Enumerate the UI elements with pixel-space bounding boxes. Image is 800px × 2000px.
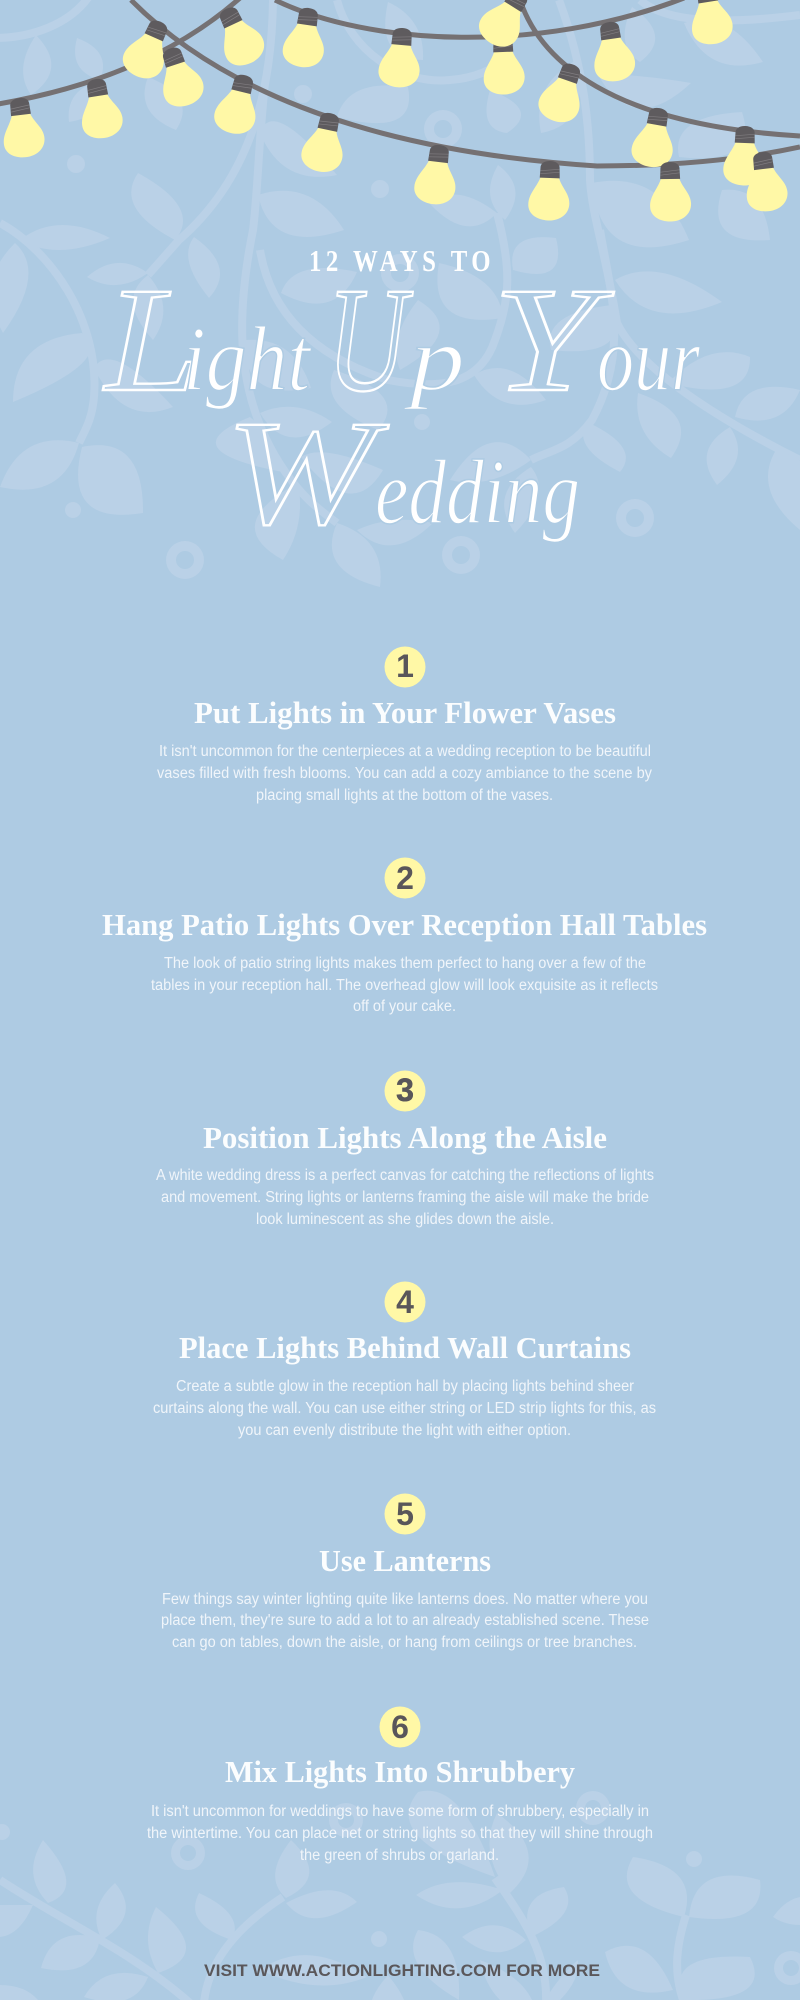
heading 1: Put Lights in Your Flower Vases	[194, 695, 616, 730]
body text 4: you can evenly distribute the light with either option.	[238, 1422, 571, 1439]
panel: tip 5	[161, 1494, 649, 1651]
body text 6: It isn't uncommon for weddings to have some form of shrubbery, especially in	[151, 1803, 649, 1820]
number badge 4	[384, 1282, 426, 1322]
body text 5: place them, they're sure to add a lot to an already established scene. These	[161, 1612, 649, 1629]
number badge 3: 3	[396, 1072, 414, 1108]
number badge 2: 2	[396, 860, 414, 896]
number badge 6	[380, 1706, 420, 1748]
panel: tip 4	[153, 1282, 656, 1439]
title line 2: W	[225, 390, 389, 556]
heading 4: Place Lights Behind Wall Curtains	[179, 1330, 631, 1365]
body text 2: tables in your reception hall. The overhead glow will look exquisite as it reflects	[151, 977, 658, 994]
top foliage background	[0, 0, 800, 587]
heading 5: Use Lanterns	[319, 1543, 491, 1578]
number badge 4: 4	[396, 1284, 414, 1320]
body text 1: vases filled with fresh blooms. You can add a cozy ambiance to the scene by	[157, 765, 652, 782]
body text 6: the wintertime. You can place net or string lights so that they will shine through	[147, 1825, 653, 1842]
panel: tip 2	[102, 858, 707, 1015]
body text 1	[157, 743, 652, 804]
number badge 5: 5	[396, 1496, 414, 1532]
body text 2: off of your cake.	[353, 998, 456, 1015]
body text 6	[147, 1803, 653, 1864]
heading 6: Mix Lights Into Shrubbery	[225, 1754, 575, 1789]
body text 3: and movement. String lights or lanterns framing the aisle will make the bride	[161, 1189, 649, 1206]
body text 1: It isn't uncommon for the centerpieces at a wedding reception to be beautiful	[159, 743, 651, 760]
title kicker: 12 WAYS TO	[309, 244, 491, 279]
body text 6: the green of shrubs or garland.	[300, 1847, 499, 1864]
body text 4: curtains along the wall. You can use either string or LED strip lights for this, as	[153, 1400, 656, 1417]
title line 1: L	[103, 257, 200, 423]
panel: tip 3	[156, 1070, 654, 1228]
body text 4: Create a subtle glow in the reception hall by placing lights behind sheer	[176, 1378, 634, 1395]
body text 2	[151, 955, 658, 1015]
string light bulbs	[0, 0, 790, 222]
body text 3: A white wedding dress is a perfect canvas for catching the reflections of lights	[156, 1167, 654, 1184]
number badge 6: 6	[391, 1709, 409, 1745]
body text 3: look luminescent as she glides down the aisle.	[256, 1211, 554, 1228]
heading 2: Hang Patio Lights Over Reception Hall Tables	[102, 907, 707, 942]
number badge 2	[384, 858, 426, 898]
body text 1: placing small lights at the bottom of the vases.	[256, 787, 553, 804]
body text 3	[156, 1167, 654, 1228]
title line 1: our	[597, 308, 701, 410]
footer call to action: VISIT WWW.ACTIONLIGHTING.COM FOR MORE	[204, 1961, 600, 1980]
number badge 1: 1	[396, 648, 414, 684]
heading 3: Position Lights Along the Aisle	[203, 1120, 607, 1155]
title line 1: U	[327, 257, 413, 423]
number badge 5	[384, 1494, 426, 1534]
body text 2: The look of patio string lights makes them perfect to hang over a few of the	[164, 955, 646, 972]
panel: tip 6	[147, 1706, 653, 1864]
title line 1: Y	[492, 257, 614, 423]
body text 4	[153, 1378, 656, 1439]
title line 2: edding	[375, 441, 580, 543]
body text 5	[161, 1591, 649, 1651]
body text 5: can go on tables, down the aisle, or hang from ceilings or tree branches.	[172, 1634, 637, 1651]
number badge 1	[384, 646, 426, 688]
string light wires	[0, 0, 800, 166]
title line 1: ight	[183, 308, 312, 410]
number badge 3	[384, 1070, 426, 1112]
body text 5: Few things say winter lighting quite like lanterns does. No matter where you	[162, 1591, 648, 1608]
bottom foliage background	[0, 1791, 800, 2000]
title line 1: p	[403, 308, 465, 410]
panel: tip 1	[157, 646, 652, 804]
